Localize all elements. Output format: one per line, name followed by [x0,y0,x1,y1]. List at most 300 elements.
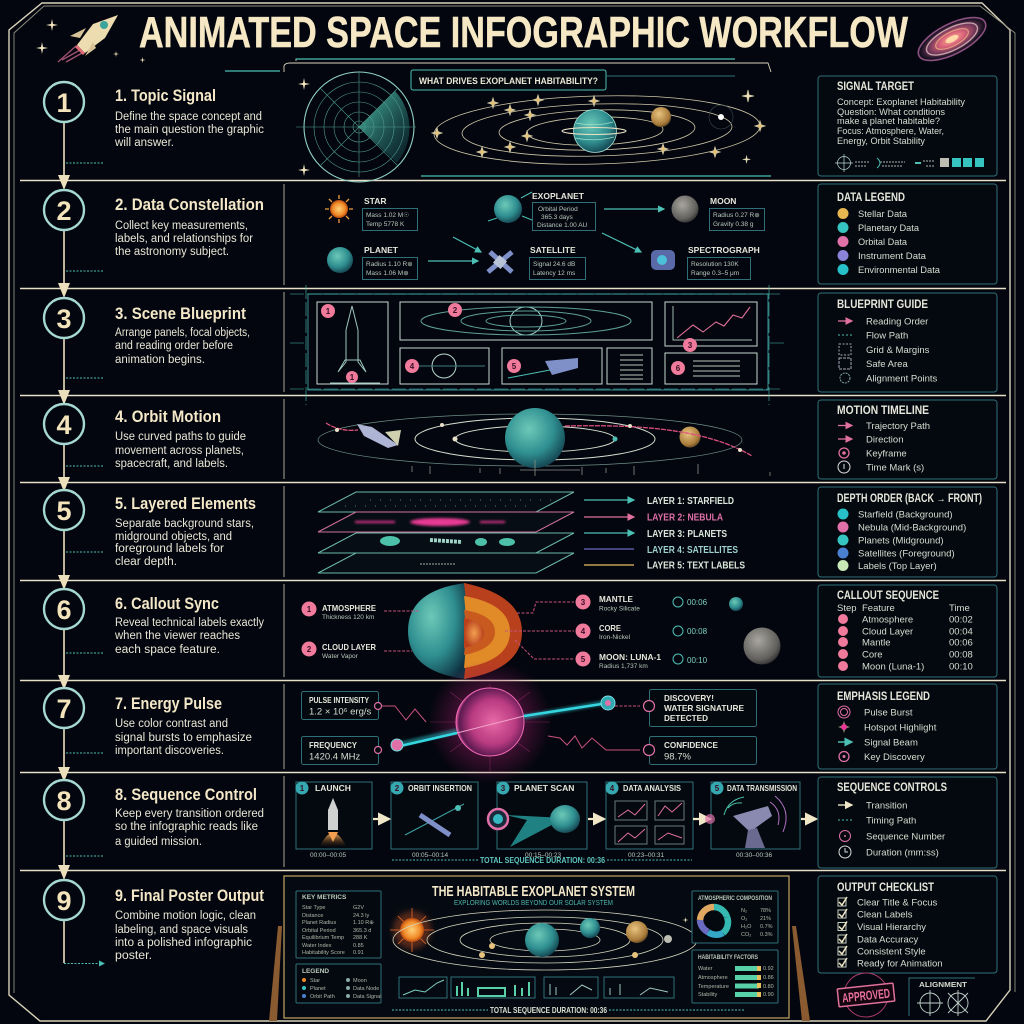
step 6 text: each space feature. [115,644,220,656]
step 2 text: 2. Data Constellation [115,195,264,214]
signal target icons and swatches [835,154,984,172]
key metrics panel: 24.3 ly [353,913,369,919]
discovery box: DISCOVERY! [664,693,714,703]
moon node: MOON [710,196,736,206]
orbit paths [318,414,742,466]
key metrics panel: 0.85 [353,943,364,949]
panel: callout sync scene [302,583,780,679]
approved stamp [836,970,896,1020]
step 8 text: a guided mission. [115,836,202,848]
step 7 text: important discoveries. [115,745,224,757]
pulse intensity box: 1.2 × 10⁶ erg/s [309,706,372,718]
step 6 number badge: 6 [56,595,72,625]
panel: blueprint guide: Flow Path [866,330,908,342]
right labels: Iron-Nickel [599,634,631,641]
star node: STAR [364,196,387,206]
step 4 number badge [44,404,84,444]
step 2 orbit insertion [390,782,478,859]
step 1 text: Define the space concept and [115,111,262,123]
icon: galaxy [909,7,995,71]
planet cutaway [408,583,522,679]
habitability factors panel: Temperature [698,984,729,990]
step 3 text: animation begins. [115,354,205,366]
confidence box [650,736,756,764]
panel: signal target: Focus: Atmosphere, Water, [837,126,944,137]
panel: emphasis legend: Hotspot Highlight [864,722,937,734]
panel: scene blueprint [290,285,785,405]
satellite node [488,245,586,280]
habitability factors panel: Stability [698,992,718,998]
question box [411,70,735,90]
panel: callout sequence: Step [837,603,857,614]
legend panel: Planet [310,986,326,992]
step 8 text: so the infographic reads like [115,821,258,833]
layer labels: LAYER 4: SATELLITES [647,545,738,556]
panel: blueprint guide: BLUEPRINT GUIDE [837,299,928,311]
step 1 text: 1. Topic Signal [115,86,216,105]
panel: data legend: Orbital Data [858,237,908,248]
legend panel: Data Node [353,986,379,992]
planets layer art [380,536,515,546]
left labels: Thickness 120 km [322,614,374,621]
panel: motion timeline: Direction [866,434,904,446]
planet node [327,245,418,280]
step 5 text: Separate background stars, [115,518,254,530]
habitability factors panel: Atmosphere [698,975,728,981]
panel: signal target [818,76,997,176]
step 1 launch: 00:00–00:05 [310,852,347,859]
habitability factors panel: Water [698,966,713,972]
atmospheric composition panel: 78% [760,908,771,914]
exoplanet node: Distance 1.00 AU [537,222,588,229]
step 3 planet scan: PLANET SCAN [514,783,574,793]
panel: motion timeline: Trajectory Path [866,421,930,432]
step 1 number badge: 1 [56,88,72,118]
planet node: Radius 1.10 R⊕ [366,261,413,268]
satellite node: Signal 24.6 dB [533,261,575,268]
step 1 text [114,86,264,149]
frequency box: 1420.4 MHz [309,752,360,762]
step 4 text [115,407,246,470]
burst rays [430,684,550,772]
question box: WHAT DRIVES EXOPLANET HABITABILITY? [419,76,598,87]
habitability factors panel: 0.86 [763,975,774,981]
layer labels [647,496,745,572]
step 3 planet scan: 00:15–00:23 [525,852,562,859]
key metrics panel: 365.3 d [353,928,371,934]
step 2 orbit insertion: 00:05–00:14 [412,852,449,859]
step 4 data analysis: 4 [610,784,615,793]
reading order badges [321,303,697,383]
key metrics panel: Water Index [302,943,332,949]
orbit system [432,90,765,168]
panel: callout sequence [818,585,997,677]
panel: data constellation scene [325,191,764,280]
panel: blueprint guide: Grid & Margins [866,345,930,356]
key markers [374,700,654,756]
step 7 text: signal bursts to emphasize [115,732,252,744]
step 7 text: 7. Energy Pulse [115,694,222,713]
frequency box [302,736,378,764]
mini charts [399,977,674,998]
panel: sequence controls: Sequence Number [866,832,945,842]
step 8 number badge [44,780,84,820]
step 5 data transmission: DATA TRANSMISSION [727,783,797,793]
step 1 launch [296,782,372,859]
habitability factors panel: 0.90 [763,992,774,998]
panel: motion timeline: Keyframe [866,448,907,460]
atmospheric composition panel: H₂O [741,924,752,930]
timestamps: 00:06 [687,598,708,607]
radar [296,72,416,182]
step 5 text: midground objects, and [115,531,232,543]
nebula layer art [355,518,505,526]
panel: callout sequence: 00:02 [949,614,973,626]
step 8 number badge: 8 [56,786,72,816]
panel: output checklist: Consistent Style [857,946,926,958]
panel: output checklist: Clean Labels [857,910,913,920]
time marks [412,460,770,476]
alignment badge: ALIGNMENT [919,980,967,989]
step 3 number badge [44,298,84,338]
step 3 planet scan [496,782,587,859]
keyframes [335,423,742,452]
panel: data legend: Stellar Data [858,209,908,220]
planet [505,408,565,468]
panel: callout sequence: 00:06 [949,638,973,648]
panel: blueprint guide [818,293,997,392]
right labels [576,594,661,670]
step 9 text: into a polished infographic [115,937,252,949]
step 9 text: labeling, and space visuals [115,924,248,936]
step 4 data analysis: DATA ANALYSIS [623,783,681,793]
step 4 number badge: 4 [56,410,72,440]
step 5 data transmission: 00:30–00:36 [736,852,773,859]
panel: blueprint guide: Reading Order [866,316,928,328]
legend panel: LEGEND [302,968,329,975]
spectrograph node: Range 0.3–5 μm [691,270,739,277]
exoplanet node: Orbital Period [538,206,578,213]
step 5 text: 5. Layered Elements [115,494,256,513]
panel: emphasis legend: Key Discovery [864,752,925,763]
icon: rocket [36,15,146,63]
step 1 launch: 1 [300,784,305,793]
step 4 text: Use curved paths to guide [115,431,246,443]
step 8 text [115,785,264,848]
panel: orbit motion scene [318,408,770,476]
starfield layer art [345,500,560,506]
habitability factors panel: 0.80 [763,984,774,990]
poster [284,876,789,1018]
small planet [729,597,743,611]
reading order badges: 5 [512,362,517,371]
panel: sequence control scene [296,782,816,865]
panel: blueprint guide: Safe Area [866,359,908,370]
step 3 text [115,304,250,366]
layer labels: LAYER 2: NEBULA [647,512,723,524]
moon node: Radius 0.27 R⊕ [713,212,760,219]
step 9 text [115,886,264,962]
panel: emphasis legend: Signal Beam [864,738,918,748]
step 5 text: foreground labels for [115,543,224,555]
layer planes [318,492,574,573]
layer labels: LAYER 3: PLANETS [647,529,727,540]
step 7 text: Use color contrast and [115,718,228,730]
step 2 text: Collect key measurements, [115,220,248,232]
panel: callout sequence: 00:08 [949,650,973,660]
signal traces [380,706,640,750]
timestamps: 00:10 [687,656,708,665]
layer arrows [584,500,634,565]
reading order badges: 3 [688,341,693,350]
panel: output checklist: Clear Title & Focus [857,898,937,908]
legend panel: Moon [353,978,367,984]
panel: motion timeline [818,400,997,479]
poster subtitle: EXPLORING WORLDS BEYOND OUR SOLAR SYSTEM [454,898,613,907]
step 5 data transmission: 5 [715,784,720,793]
panel: depth order: Starfield (Background) [858,510,953,520]
step 2 text: the astronomy subject. [115,246,229,258]
pulse intensity box: PULSE INTENSITY [309,695,369,705]
panel: blueprint guide: Alignment Points [866,374,938,384]
step 6 number badge [44,589,84,629]
text layer art [420,563,455,565]
step 8 text: Keep every transition ordered [115,808,264,820]
step 3 text: Arrange panels, focal objects, [115,327,250,339]
panel: data legend [818,184,997,284]
panel: output checklist: Ready for Animation [857,958,943,970]
step 2 number badge: 2 [56,196,72,226]
panel: callout sequence: Cloud Layer [862,626,913,638]
glow [428,660,552,784]
step 5 data transmission [710,782,800,859]
atmospheric composition panel: CO₂ [741,932,751,938]
panel: signal target: make a planet habitable? [837,116,940,127]
panel: callout sequence: Feature [862,603,895,614]
step 8 text: 8. Sequence Control [115,785,257,804]
spectrograph node: Resolution 130K [691,261,739,268]
panel: depth order [818,487,997,577]
left labels: 1 [307,605,312,614]
callout connectors [384,602,574,659]
alignment badge [909,978,975,1016]
connector arrows [428,209,664,261]
panel: output checklist [818,876,997,973]
step 4 text: movement across planets, [115,445,244,457]
habitability factors panel: 0.92 [763,966,774,972]
discovery box: WATER SIGNATURE [664,703,744,713]
left labels: CLOUD LAYER [322,642,376,652]
key metrics panel: 1.10 R⊕ [353,920,374,926]
step 5 text [115,494,256,568]
step 5 text: clear depth. [115,556,177,568]
step 9 text: Combine motion logic, clean [115,910,256,922]
panel: signal target: SIGNAL TARGET [837,81,914,93]
panel: callout sequence: Time [949,603,970,614]
step 9 text: poster. [115,950,152,962]
panel: motion timeline: Time Mark (s) [866,462,924,474]
habitability factors panel [692,950,778,1003]
trajectory path [326,423,752,456]
panel: data legend: Instrument Data [858,251,927,262]
signal beam [396,702,608,747]
left labels [302,602,376,660]
panel: topic signal scene [225,59,771,182]
pulse nodes [391,696,615,751]
timeline: vertical flow line, arrows and branches [58,122,104,964]
panel: data legend: Environmental Data [858,265,941,276]
step 7 text [115,694,252,757]
reading order badges: 6 [676,364,681,373]
step 2 number badge [44,190,84,230]
frequency box: FREQUENCY [309,740,357,750]
pink planet [456,688,524,756]
atmospheric composition panel: 0.7% [760,924,773,930]
key metrics panel: Distance [302,913,323,919]
key metrics panel [296,891,381,958]
step 3 number badge: 3 [56,304,72,334]
right labels: Rocky Silicate [599,606,640,612]
panel: callout sequence: Atmosphere [862,614,913,626]
panel: motion timeline: MOTION TIMELINE [837,405,929,417]
step 9 number badge [44,880,84,920]
transition arrows [373,818,816,820]
atmospheric composition panel: 21% [760,916,771,922]
atmospheric composition panel: 0.3% [760,932,773,938]
legend panel: Star [310,978,320,984]
step 1 text: the main question the graphic [115,124,264,136]
planet node: Mass 1.06 M⊕ [366,270,409,277]
reading order badges: 1 [350,373,355,382]
moon [680,426,700,448]
discovery box: DETECTED [664,713,708,723]
right labels: CORE [599,623,621,633]
panel: depth order: DEPTH ORDER (BACK → FRONT) [837,493,982,505]
key metrics panel: Star Type [302,905,325,911]
panel: emphasis legend: Pulse Burst [864,708,913,718]
key metrics panel: 288 K [353,935,368,941]
key metrics panel: KEY METRICS [302,894,347,901]
timestamps: 00:08 [687,627,708,636]
easel legs [269,926,810,1021]
legend panel: Data Signal [353,994,381,1000]
panel: layered elements scene [318,492,745,573]
key metrics panel: Planet Radius [302,920,336,926]
step 5 number badge [44,490,84,530]
panel: energy pulse scene [302,660,756,784]
confidence box: 98.7% [664,752,691,762]
key metrics panel: Equilibrium Temp [302,935,344,941]
lines layout box [607,348,652,384]
panel: data legend: Planetary Data [858,223,920,234]
planet layout box [400,348,489,384]
step 3 text: and reading order before [115,340,233,352]
right labels: 4 [581,627,586,636]
planet node: PLANET [364,245,399,255]
moon [744,628,780,664]
step 1 launch: LAUNCH [315,783,351,793]
habitability factors panel: HABITABILITY FACTORS [698,954,759,961]
approved stamp: APPROVED [841,986,891,1005]
panel: sequence controls: SEQUENCE CONTROLS [837,782,947,794]
step 1 number badge [44,82,84,122]
layer labels: LAYER 5: TEXT LABELS [647,560,745,572]
panel: signal target: Question: What conditions [837,107,945,118]
star node: Temp 5778 K [366,221,405,228]
step 4 text: spacecraft, and labels. [115,458,228,470]
key metrics panel: G2V [353,905,364,911]
step 3 planet scan: 3 [501,784,506,793]
star node [325,195,418,230]
moon node: Gravity 0.38 g [713,221,754,228]
panel: emphasis legend [818,684,997,769]
panel: depth order: Nebula (Mid-Background) [858,522,966,534]
panel: output checklist: Data Accuracy [857,934,918,946]
panel: callout sequence: 00:10 [949,662,973,672]
step 2 orbit insertion: 2 [395,784,400,793]
left labels: ATMOSPHERE [322,603,376,613]
panel: sequence controls [818,777,997,868]
legend panel [296,964,381,1003]
step 4 data analysis [606,782,693,859]
orbit layout box [400,302,652,340]
timestamps [673,597,708,665]
step 4 data analysis: 00:23–00:31 [628,852,665,859]
chart layout box [665,302,757,346]
atmospheric composition panel [692,891,778,943]
step 6 text: 6. Callout Sync [115,594,219,613]
poster title: THE HABITABLE EXOPLANET SYSTEM [432,883,635,900]
label layout box [665,353,757,384]
pink scan markers [488,809,715,829]
right labels: Radius 1,737 km [599,663,648,670]
right labels: MANTLE [599,594,633,604]
left labels: 2 [307,645,312,654]
exoplanet node [488,191,596,230]
step 2 text: labels, and relationships for [115,233,253,245]
reading order badges: 2 [453,306,458,315]
poster planets [479,917,688,958]
layer labels: LAYER 1: STARFIELD [647,496,734,507]
right labels: 5 [581,655,586,664]
key metrics panel: Orbital Period [302,928,336,934]
panel: depth order: Labels (Top Layer) [858,561,937,572]
poster orbits [393,910,697,970]
right labels: 3 [581,598,586,607]
rocket wireframe box [317,302,388,384]
step 9 text: 9. Final Poster Output [115,886,264,905]
step 7 number badge: 7 [56,694,72,724]
key metrics panel: 0.91 [353,950,364,956]
right labels: MOON: LUNA-1 [599,652,661,662]
satellite node: Latency 12 ms [533,270,576,277]
discovery box [650,690,756,726]
star node: Mass 1.02 M☉ [366,211,409,219]
panel: signal target: Concept: Exoplanet Habitability [837,97,965,108]
spacecraft [357,424,401,448]
atmospheric composition panel: O₂ [741,916,747,922]
atmospheric composition panel: N₂ [741,908,747,914]
poster duration: TOTAL SEQUENCE DURATION: 00:36 [490,1005,607,1015]
row divider lines [20,180,1006,870]
panel: sequence controls: Transition [866,800,907,812]
panel: sequence controls: Duration (mm:ss) [866,848,939,858]
panel: output checklist: OUTPUT CHECKLIST [837,882,934,894]
left labels: Water Vapor [322,653,359,660]
step 2 text [115,195,264,258]
panel: sequence controls: Timing Path [866,816,916,826]
step 9 number badge: 9 [56,886,72,916]
